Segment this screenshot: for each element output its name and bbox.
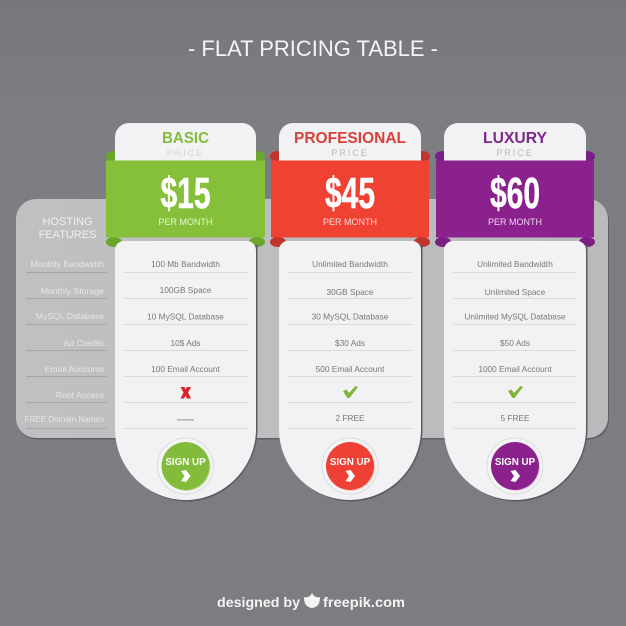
price: basic: $15 xyxy=(160,169,210,218)
feature rows: luxury: Unlimited MySQL Database xyxy=(464,312,566,322)
feature rows: profesional xyxy=(312,259,389,423)
feature rows: basic xyxy=(147,259,224,374)
footer credit: designed by xyxy=(217,594,300,610)
per month: PER MONTH xyxy=(323,217,377,227)
feature rows: profesional: Unlimited Bandwidth xyxy=(312,259,388,269)
feature rows: profesional: 2 FREE xyxy=(335,413,365,423)
panel: hosting features xyxy=(16,199,609,440)
feature rows: luxury: 1000 Email Account xyxy=(478,364,552,374)
plan name: basic: BASIC xyxy=(162,130,209,147)
icon: check xyxy=(508,386,523,398)
feature rows: basic: 10$ Ads xyxy=(170,338,200,348)
per month: PER MONTH xyxy=(158,217,212,227)
price band: luxury xyxy=(436,160,594,238)
footer credit: freepik.com xyxy=(323,594,405,610)
ribbon ends xyxy=(106,151,265,247)
feature rows: basic: 100 Email Account xyxy=(151,364,221,374)
feature labels: Monthly Bandwidth xyxy=(31,259,104,269)
feature rows: luxury: $50 Ads xyxy=(500,338,530,348)
dash xyxy=(177,418,194,421)
icon: check xyxy=(343,386,358,398)
button: sign up luxury: SIGN UP xyxy=(495,457,536,468)
ribbon ends xyxy=(270,151,430,247)
feature rows: luxury: Unlimited Bandwidth xyxy=(477,259,553,269)
ribbon ends xyxy=(435,151,595,247)
footer credit xyxy=(217,593,405,610)
feature rows: basic: 10 MySQL Database xyxy=(147,312,224,322)
plan name: luxury: LUXURY xyxy=(483,130,547,147)
feature rows: luxury xyxy=(464,259,566,423)
icon: freepik logo xyxy=(304,593,320,608)
plan name: profesional: PROFESIONAL xyxy=(294,130,406,147)
feature rows: luxury: 5 FREE xyxy=(500,413,530,423)
card body: profesional xyxy=(280,245,422,502)
feature rows: profesional: 30GB Space xyxy=(326,287,374,297)
heading: hosting features: HOSTING xyxy=(42,216,93,228)
feature rows: profesional: $30 Ads xyxy=(335,338,365,348)
button: sign up luxury xyxy=(487,438,543,494)
heading: hosting features: FEATURES xyxy=(39,229,96,241)
button: sign up profesional xyxy=(322,438,378,494)
feature labels: FREE Domain Names xyxy=(24,415,104,424)
panel: luxury plan xyxy=(435,123,595,502)
card body: basic xyxy=(116,245,258,502)
feature rows: basic: 100GB Space xyxy=(160,285,212,295)
card top: luxury xyxy=(444,123,586,165)
button: sign up profesional: SIGN UP xyxy=(330,457,371,468)
feature rows: luxury: Unlimited Space xyxy=(485,287,546,297)
feature labels: Root Access xyxy=(56,390,105,400)
feature rows: profesional: 500 Email Account xyxy=(316,364,385,374)
icon: cross xyxy=(180,387,191,398)
feature rows: profesional: 30 MySQL Database xyxy=(312,312,389,322)
button: sign up basic: SIGN UP xyxy=(165,457,206,468)
price band: profesional xyxy=(271,160,429,238)
price label: PRICE xyxy=(496,148,534,158)
panel: profesional plan xyxy=(270,123,430,502)
feature labels: Ad Credits xyxy=(63,338,105,348)
feature labels: Monthly Storage xyxy=(41,286,104,296)
feature labels xyxy=(24,259,105,424)
card top: profesional xyxy=(279,123,421,165)
title: - FLAT PRICING TABLE - xyxy=(188,36,438,61)
price band: basic xyxy=(106,160,265,238)
card top: basic xyxy=(115,123,256,165)
price label: PRICE xyxy=(331,148,369,158)
feature labels: MySQL Database xyxy=(36,311,104,321)
feature labels: Email Accounts xyxy=(45,364,105,374)
price: luxury: $60 xyxy=(490,169,540,218)
feature rows: basic: 100 Mb Bandwidth xyxy=(151,259,220,269)
price label: PRICE xyxy=(167,148,204,158)
button: sign up basic xyxy=(158,438,214,494)
per month: PER MONTH xyxy=(488,217,542,227)
panel: basic plan xyxy=(106,123,265,502)
card body: luxury xyxy=(446,245,588,502)
price: profesional: $45 xyxy=(325,169,375,218)
